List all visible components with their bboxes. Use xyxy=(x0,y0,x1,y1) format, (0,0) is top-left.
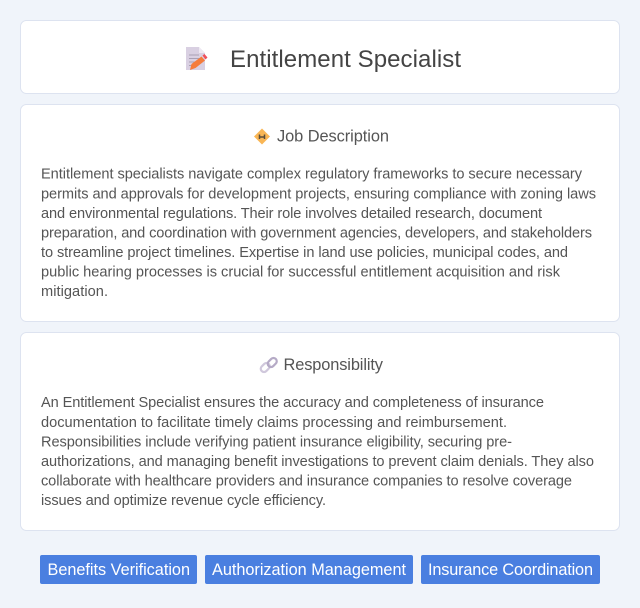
text block: job description: and environmental regulations. Their role involves detailed research, document xyxy=(41,206,542,222)
text block: responsibility: authorizations, and managing benefit investigations to prevent claim denials. They also xyxy=(41,454,594,470)
panel: responsibility xyxy=(20,332,620,530)
text block: job description: permits and approvals for development projects, ensuring compliance with zoning laws xyxy=(41,186,596,202)
text block: responsibility: issues and optimize revenue cycle efficiency. xyxy=(41,493,326,509)
text block: responsibility: collaborate with healthcare providers and insurance companies to resolve coverage xyxy=(41,474,572,490)
icon: chain link xyxy=(259,357,278,373)
text block: job description: mitigation. xyxy=(41,284,108,300)
icon: diamond sign xyxy=(254,128,270,144)
text block: job description: public hearing processes is crucial for successful entitlement acquisition and risk xyxy=(41,265,561,281)
panel: title header xyxy=(20,20,620,94)
text block: job description: to streamline project timelines. Expertise in land use policies, municipal codes, and xyxy=(41,245,568,261)
title: Entitlement Specialist xyxy=(230,46,461,73)
tag: benefits verification: Benefits Verification xyxy=(48,561,190,579)
text block: responsibility: An Entitlement Specialist ensures the accuracy and completeness of insurance xyxy=(41,395,544,411)
tag: authorization management: Authorization Management xyxy=(212,561,406,579)
icon: document with pencil xyxy=(186,47,208,70)
heading: job description: Job Description xyxy=(277,128,389,146)
text block: responsibility: Responsibilities include verifying patient insurance eligibility, securing pre- xyxy=(41,434,512,450)
text block: job description: preparation, and coordination with government agencies, developers, and stakeholders xyxy=(41,226,592,242)
text block: job description xyxy=(41,167,596,300)
tag: insurance coordination xyxy=(421,555,600,584)
tag: authorization management xyxy=(205,555,413,584)
tag: benefits verification xyxy=(40,555,197,584)
text block: responsibility xyxy=(41,395,594,509)
text block: job description: Entitlement specialists navigate complex regulatory frameworks to secure necessary xyxy=(41,167,583,183)
tag: insurance coordination: Insurance Coordination xyxy=(428,561,593,579)
text block: responsibility: documentation to facilitate timely claims processing and reimbursement. xyxy=(41,415,507,431)
panel: job description xyxy=(20,104,620,322)
heading: responsibility: Responsibility xyxy=(284,356,384,374)
